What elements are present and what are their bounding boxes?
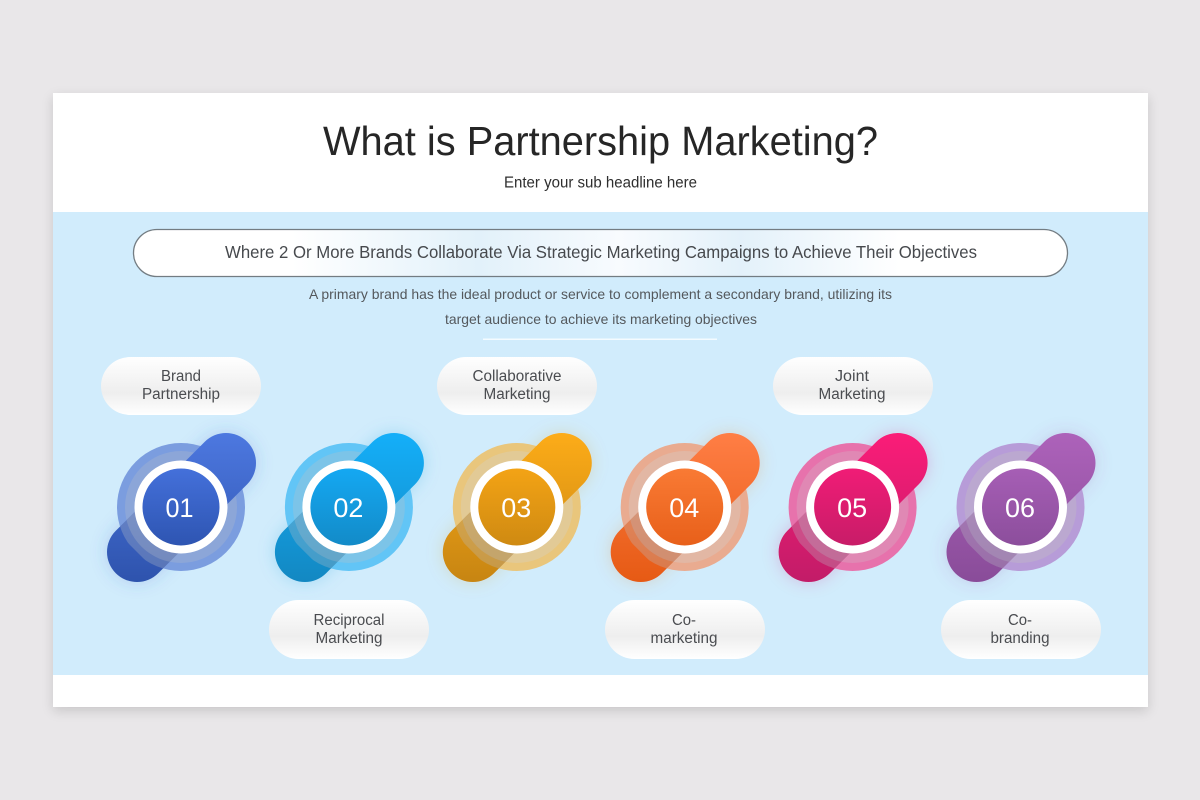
label: Co-branding: branding bbox=[990, 630, 1050, 647]
description text: target audience to achieve its marketing objectives bbox=[445, 311, 757, 327]
label: Co-marketing: Co- bbox=[672, 612, 696, 629]
badge 03: 03 bbox=[501, 493, 531, 523]
label: Reciprocal Marketing: Reciprocal bbox=[314, 612, 384, 629]
label: Brand Partnership: Brand bbox=[161, 368, 201, 385]
title: What is Partnership Marketing? bbox=[323, 118, 878, 164]
badge 04: 04 bbox=[669, 493, 699, 523]
label: Reciprocal Marketing bbox=[269, 600, 429, 659]
label: Brand Partnership: Partnership bbox=[142, 386, 220, 403]
badge 02: 02 bbox=[333, 493, 363, 523]
badge 06: 06 bbox=[1005, 493, 1035, 523]
banner: definition pill bbox=[134, 230, 1068, 276]
badge 06 bbox=[956, 443, 1084, 571]
description text bbox=[309, 286, 892, 327]
panel: light blue band bbox=[53, 212, 1148, 675]
badge 01 bbox=[117, 443, 245, 571]
badge 05: 05 bbox=[837, 493, 867, 523]
description text: A primary brand has the ideal product or service to complement a secondary brand, utilizing its bbox=[309, 286, 892, 302]
badge 05 bbox=[789, 443, 917, 571]
slide card bbox=[53, 93, 1148, 711]
badge 02 bbox=[285, 443, 413, 571]
label: Joint Marketing: Joint bbox=[835, 368, 870, 385]
badge 04 bbox=[621, 443, 749, 571]
label: Collaborative Marketing bbox=[437, 357, 597, 415]
subtitle: Enter your sub headline here bbox=[504, 174, 697, 192]
label: Brand Partnership bbox=[101, 357, 261, 415]
label: Joint Marketing: Marketing bbox=[818, 386, 886, 403]
label: Reciprocal Marketing: Marketing bbox=[316, 630, 382, 647]
label: Co-marketing bbox=[605, 600, 765, 659]
badge 01: 01 bbox=[166, 493, 194, 523]
label: Co-marketing: marketing bbox=[650, 630, 718, 647]
banner: definition pill: Where 2 Or More Brands Collaborate Via Strategic Marketing Campaigns to Achieve Their Objectives bbox=[225, 242, 977, 262]
label: Co-branding bbox=[941, 600, 1101, 659]
label: Collaborative Marketing: Marketing bbox=[484, 386, 550, 403]
label: Joint Marketing bbox=[773, 357, 933, 415]
label: Collaborative Marketing: Collaborative bbox=[472, 368, 562, 385]
label: Co-branding: Co- bbox=[1008, 612, 1032, 629]
badge 03 bbox=[453, 443, 581, 571]
